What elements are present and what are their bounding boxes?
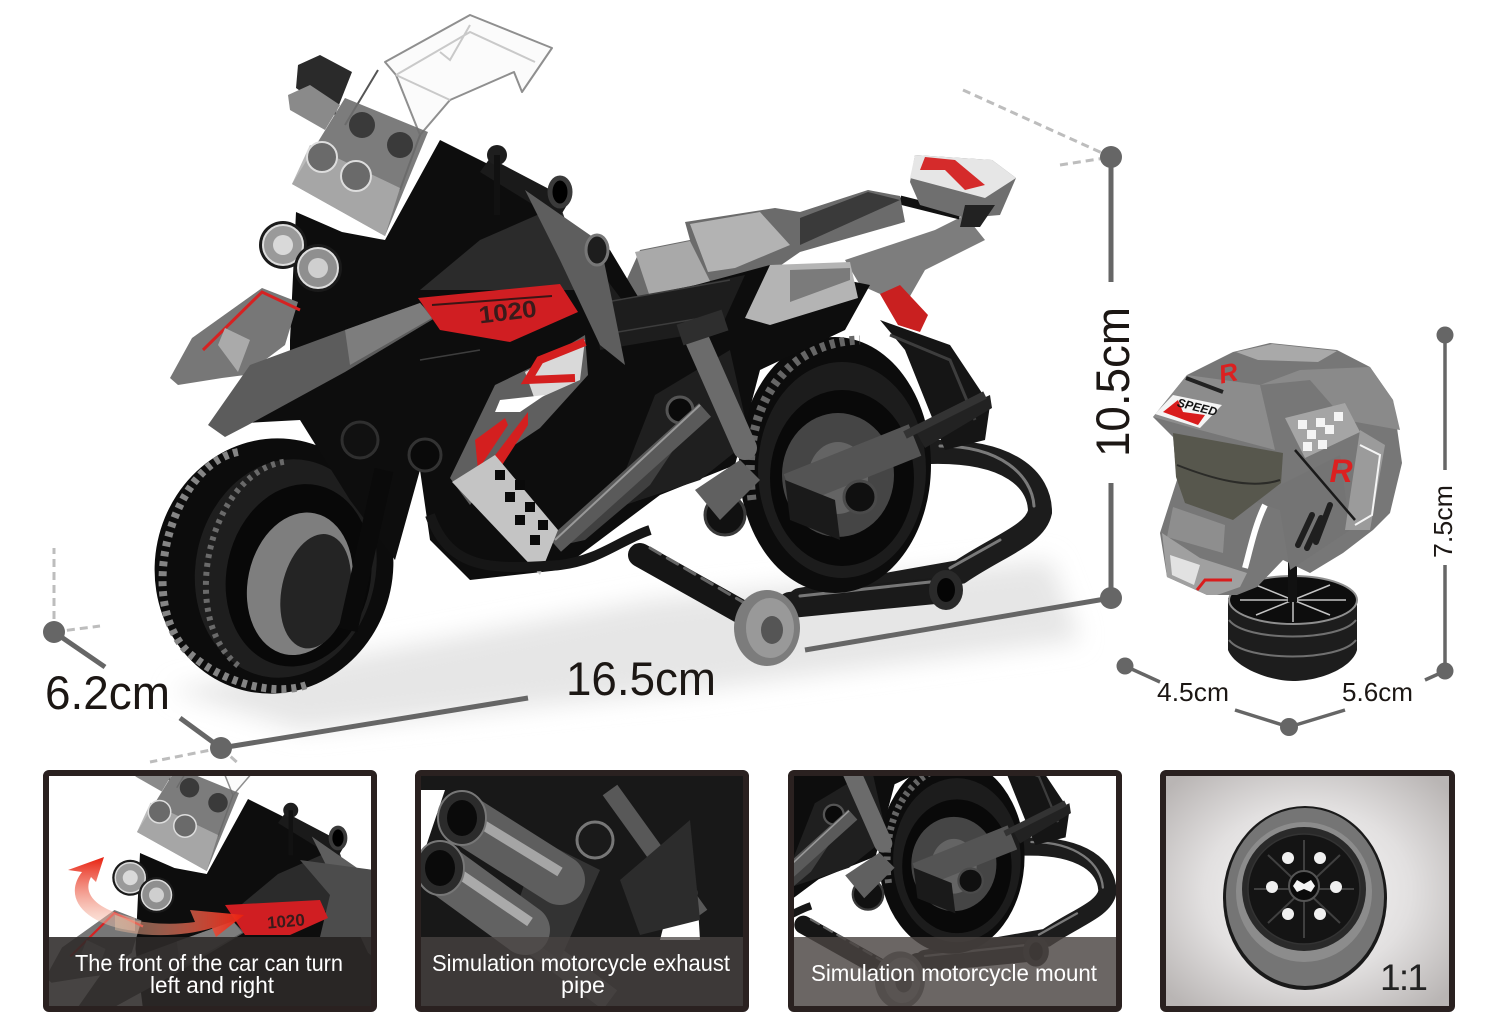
panel: exhaust pipe	[416, 773, 746, 1009]
chin guard	[1167, 507, 1225, 553]
red tank stripe	[225, 900, 328, 935]
caption	[75, 950, 343, 998]
icon: turn arrows	[68, 857, 244, 937]
caption	[432, 950, 731, 998]
panel: steering front	[43, 770, 377, 1012]
red tank stripe	[418, 284, 578, 342]
speed badge	[1155, 395, 1222, 428]
caption band	[46, 937, 374, 1009]
caption: The front of the car can turn	[75, 950, 343, 976]
caption: pipe	[561, 972, 605, 998]
width label: 6.2cm	[45, 666, 170, 719]
helmet height label: 7.5cm	[1428, 485, 1458, 558]
icon: wheel	[1223, 806, 1387, 990]
R letter top: R	[1216, 356, 1241, 390]
panel: wheel 1:1	[1163, 773, 1452, 1009]
caption band	[418, 937, 746, 1009]
red tank stripe: 1020	[266, 910, 306, 933]
dimension lines	[54, 90, 1445, 765]
front wheel	[131, 416, 417, 716]
stand wheels	[1228, 560, 1357, 681]
panel: mount	[788, 770, 1122, 1012]
red tank stripe: 1020	[477, 296, 538, 329]
speed badge: SPEED	[1176, 396, 1219, 419]
helmet width label: 5.6cm	[1342, 677, 1413, 707]
caption: left and right	[150, 972, 275, 998]
helmet shell	[1153, 343, 1402, 595]
height label: 10.5cm	[1086, 307, 1139, 457]
helmet on wheel stand	[1153, 343, 1402, 681]
motorcycle model	[131, 15, 1040, 716]
visor	[1173, 433, 1283, 520]
caption: Simulation motorcycle exhaust	[432, 950, 731, 976]
checker decal	[1285, 403, 1360, 458]
vents	[1298, 505, 1330, 548]
dimension endpoints	[43, 146, 1454, 759]
caption: Simulation motorcycle mount	[811, 960, 1098, 986]
R letter side: R	[1329, 453, 1353, 489]
length label: 16.5cm	[566, 652, 716, 705]
floor shadow	[170, 560, 1080, 730]
scale label: 1:1	[1380, 957, 1428, 998]
helmet depth label: 4.5cm	[1157, 677, 1229, 707]
caption band	[791, 937, 1119, 1009]
